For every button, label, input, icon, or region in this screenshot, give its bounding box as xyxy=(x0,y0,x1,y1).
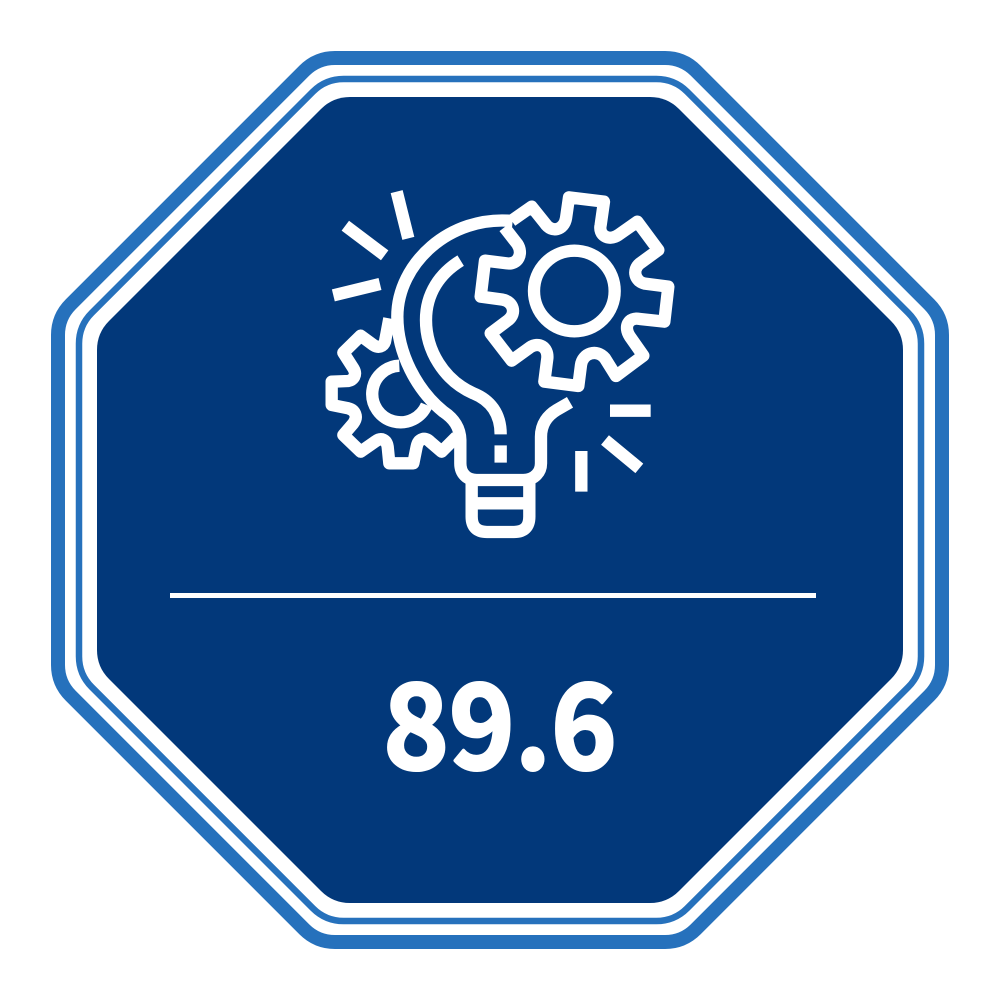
icon: bulb outline xyxy=(397,220,570,480)
inner blue octagon ring xyxy=(79,79,921,921)
icon: bulb base xyxy=(472,480,529,532)
icon: small gear hub xyxy=(372,366,427,422)
value: 89.6: 89.6 xyxy=(383,633,617,804)
icon: small gear xyxy=(332,318,457,463)
outer blue octagon ring xyxy=(58,58,942,942)
icon: large gear xyxy=(481,197,668,386)
divider line xyxy=(170,593,816,598)
icon: light bulb with gears xyxy=(332,192,668,532)
navy octagon panel xyxy=(97,97,903,903)
icon: large gear hub xyxy=(534,251,615,331)
icon: bulb inner highlight xyxy=(426,261,501,463)
icon: spark rays xyxy=(333,192,651,492)
